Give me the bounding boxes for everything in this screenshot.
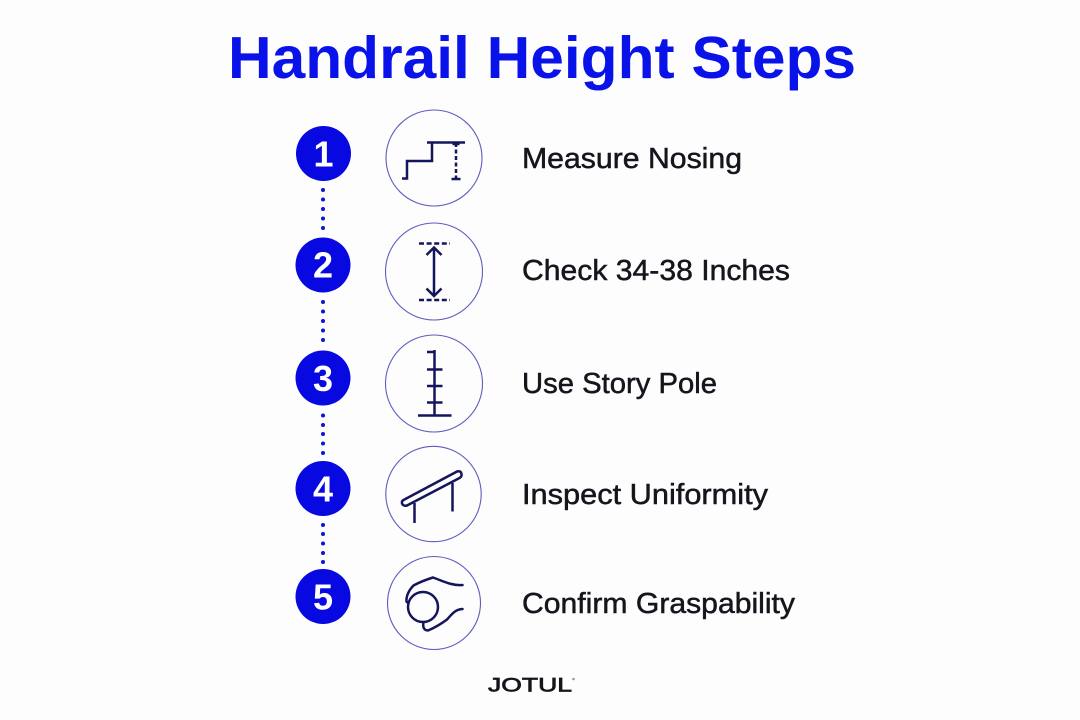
number badge 1: 1 — [313, 134, 334, 174]
icon: sloped handrail — [386, 446, 481, 542]
icon: height range arrow — [386, 223, 482, 320]
step 2 — [296, 223, 790, 320]
connector dots 2-3 — [321, 300, 325, 342]
icon: story pole — [386, 335, 482, 432]
label: Use Story Pole: Use Story Pole — [522, 368, 717, 400]
step 1 — [296, 110, 742, 206]
icon: stair nosing measure — [386, 110, 482, 206]
number badge 2: 2 — [313, 244, 333, 286]
number badge 2 — [296, 238, 350, 292]
number badge 4 — [296, 461, 350, 516]
brand logo: JOTUL — [488, 674, 572, 696]
title: Handrail Height Steps — [228, 25, 856, 91]
connector dots 4-5 — [321, 523, 325, 564]
label: Measure Nosing: Measure Nosing — [522, 143, 742, 175]
number badge 4: 4 — [313, 468, 333, 510]
number badge 3: 3 — [313, 358, 333, 399]
step 4 — [296, 446, 769, 542]
step 5 — [296, 556, 796, 650]
number badge 1 — [296, 126, 351, 181]
label: Confirm Graspability: Confirm Graspability — [522, 588, 796, 620]
icon: hand gripping rail — [388, 556, 480, 650]
number badge 3 — [296, 350, 350, 406]
number badge 5 — [296, 569, 350, 624]
label: Check 34-38 Inches: Check 34-38 Inches — [522, 255, 790, 287]
step 3 — [296, 335, 717, 432]
connector dots 3-4 — [321, 414, 325, 455]
number badge 5: 5 — [313, 576, 333, 618]
label: Inspect Uniformity: Inspect Uniformity — [522, 479, 769, 511]
connector dots 1-2 — [321, 188, 325, 230]
